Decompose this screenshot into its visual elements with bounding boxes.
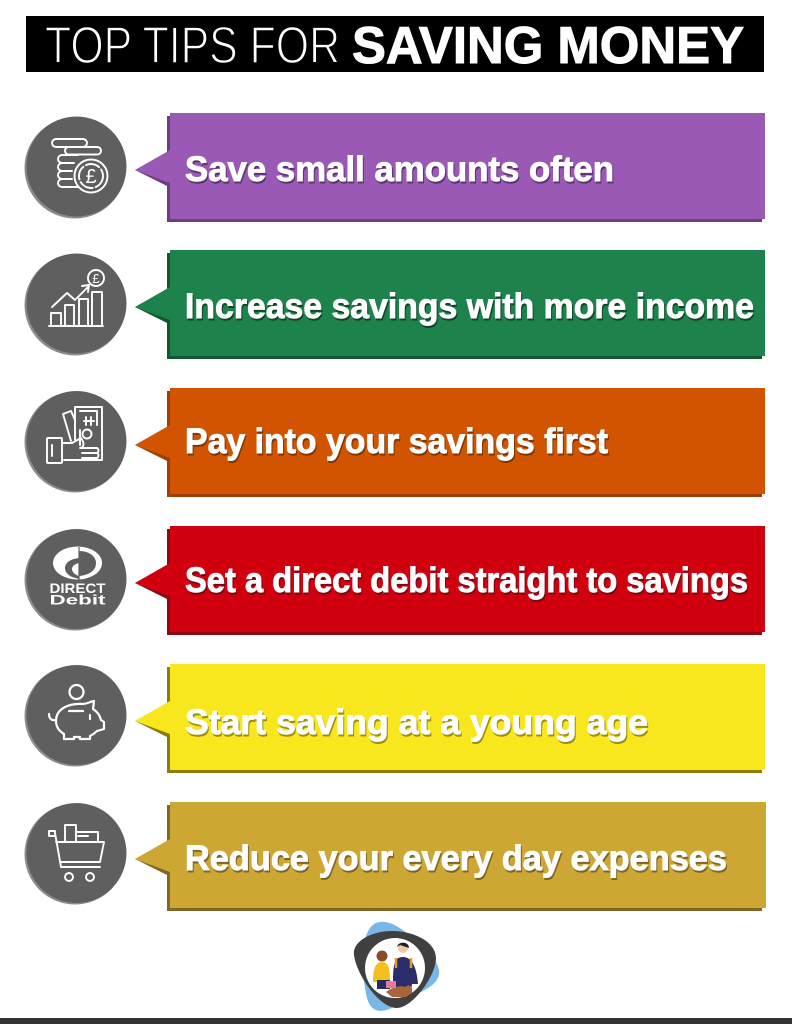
banner [135,802,766,911]
tip 5: start saving at a young age [24,664,765,773]
banner [135,526,765,635]
tip text: Reduce your every day expenses [185,839,727,878]
tip 6: reduce your every day expenses [24,802,766,911]
logo: people in a rounded triangle [354,922,439,1011]
icon: growth chart [24,254,126,356]
icon: direct debit logo [24,529,126,630]
banner [135,113,765,222]
icon: coins [24,116,126,218]
tip text: Set a direct debit straight to savings [185,561,748,600]
tip text: Save small amounts often [185,150,614,189]
tip 2: increase savings with more income [24,250,765,359]
icon: hand holding cash [24,391,126,492]
icon: direct debit logo: DIRECT [50,580,106,596]
banner [135,250,765,359]
man [393,943,418,993]
title: SAVING MONEY [352,17,744,75]
tip 3: pay into your savings first [24,388,765,497]
banner [135,664,765,773]
icon: coins: £ [85,166,97,188]
woman [373,950,390,989]
title: TOP TIPS FOR [45,17,340,75]
dog [386,985,412,997]
tip 1: save small amounts often [24,113,765,222]
tip text: Start saving at a young age [185,703,648,742]
handbag [386,981,396,988]
tip 4: set a direct debit straight to savings [24,526,765,635]
banner [135,388,765,497]
footer bar [0,1018,792,1024]
icon: direct debit logo: Debit [50,592,106,608]
icon: shopping cart [24,803,126,904]
tip text: Increase savings with more income [185,287,754,326]
tip text: Pay into your savings first [185,422,608,461]
icon: piggy bank [24,665,126,766]
icon: growth chart: £ [92,271,100,286]
title [26,16,764,75]
